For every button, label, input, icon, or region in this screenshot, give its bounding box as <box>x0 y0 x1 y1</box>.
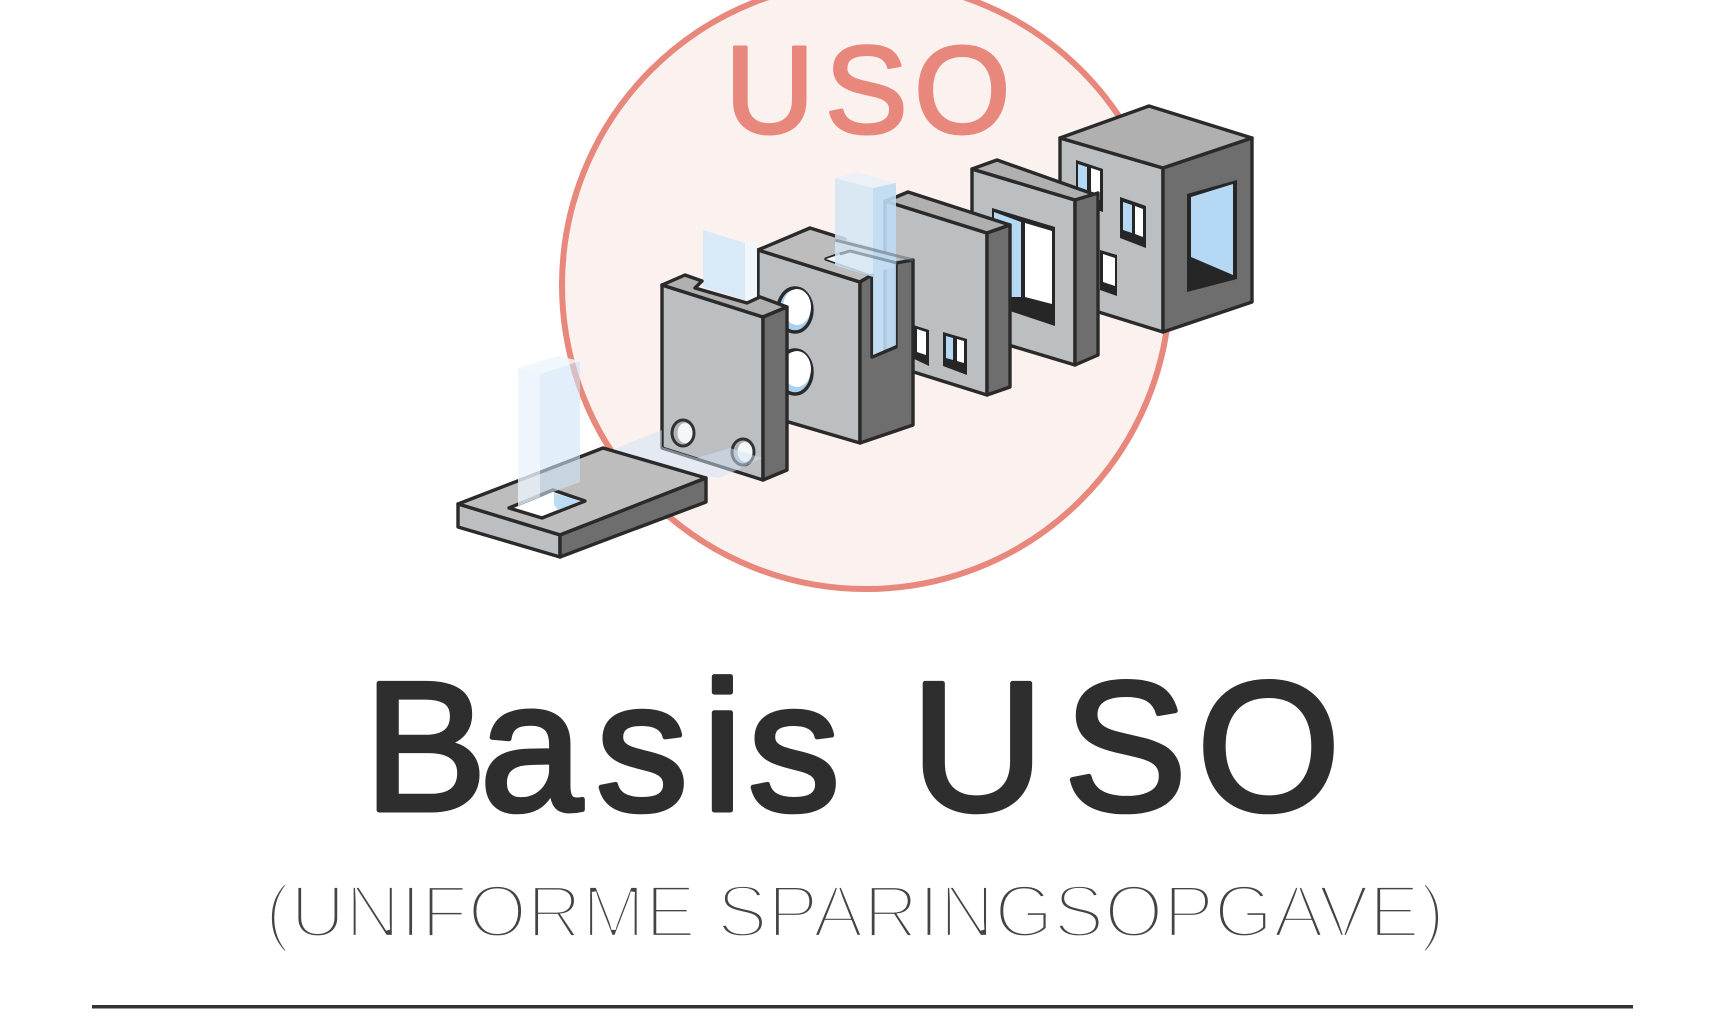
block 4: wall with large opening <box>972 160 1098 365</box>
horizontal rule <box>92 1005 1633 1008</box>
block 3: wall with windows <box>885 192 1010 395</box>
title: Basis USO: Basis <box>364 643 840 849</box>
glass column behind block 1 <box>703 230 757 303</box>
illustration: exploded building model <box>458 106 1252 557</box>
title: Basis USO: O <box>1197 643 1340 849</box>
glass duct between base plate and block 1 <box>612 430 762 478</box>
block 5: rear cube with windows <box>1060 106 1252 332</box>
block 2: wall with slot and round holes <box>758 228 913 443</box>
logo circle background <box>562 0 1170 589</box>
title: Basis USO: S <box>1064 643 1187 849</box>
block 1: front wall with two small holes <box>662 275 787 480</box>
glass column through block 2 slot <box>835 172 913 355</box>
holes <box>778 288 812 332</box>
title: Basis USO: U <box>911 643 1044 849</box>
subtitle: uniforme sparingsopgave: (UNIFORME SPARINGSOPGAVE) <box>265 870 1445 953</box>
logo text: USO: USO <box>725 22 1010 160</box>
glass column above base plate <box>518 356 580 506</box>
base plate with opening <box>458 448 706 557</box>
